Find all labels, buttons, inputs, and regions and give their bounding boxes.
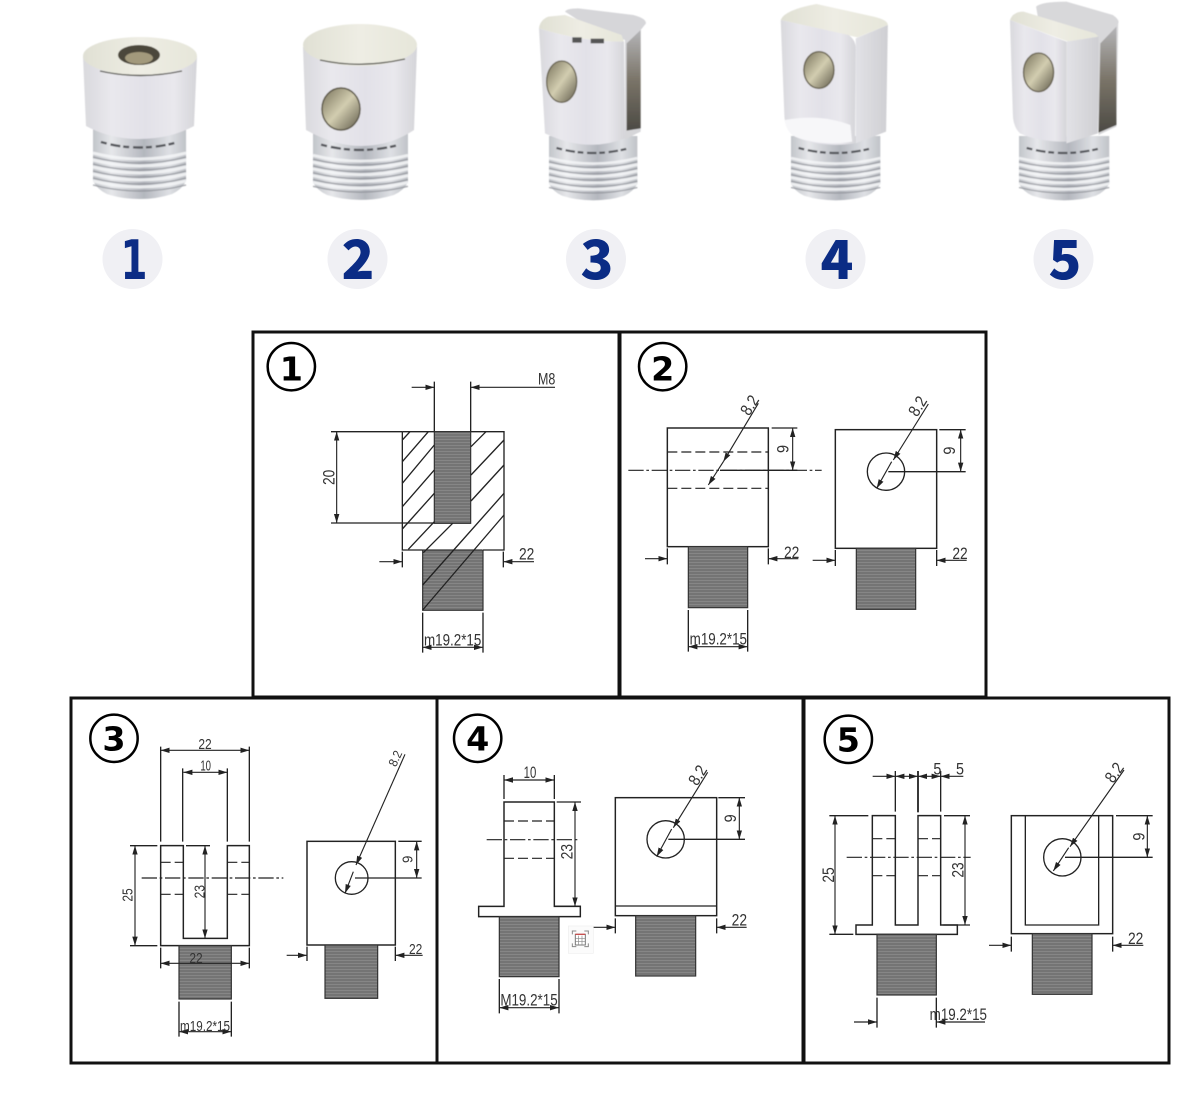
panel: drawing 2 <box>620 332 986 697</box>
number 1 <box>268 343 315 390</box>
front view <box>593 762 747 976</box>
side view <box>819 759 987 1028</box>
front view: 8.2 <box>904 393 931 420</box>
number 5 <box>825 716 872 763</box>
product 1 photo <box>83 37 197 199</box>
dimension 22 <box>379 545 534 567</box>
side view: 22 <box>189 951 203 967</box>
panel: drawing 5 <box>804 698 1169 1063</box>
dimension m19.2*15 <box>423 613 483 653</box>
badge 4 <box>806 216 866 295</box>
side view: 23 <box>949 862 968 878</box>
badge 3: 3 <box>581 216 613 295</box>
side view <box>628 392 822 652</box>
front view: 8.2 <box>386 748 405 769</box>
side view: 10 <box>200 759 211 775</box>
dimension 22: 22 <box>519 545 534 564</box>
product 3 photo <box>539 8 646 200</box>
number 5: 5 <box>837 721 860 760</box>
number 3: 3 <box>102 720 126 759</box>
front view: 8.2 <box>684 762 711 789</box>
front view <box>287 748 423 998</box>
number 2: 2 <box>651 350 674 389</box>
product 4 photo <box>781 4 888 200</box>
front view <box>813 393 968 609</box>
section view <box>402 432 504 610</box>
product photos row <box>83 2 1119 200</box>
panel: drawing 4 <box>437 698 803 1063</box>
dimension M8: M8 <box>538 369 555 388</box>
number 4 <box>454 715 501 762</box>
product 5 photo <box>1010 2 1119 200</box>
side view: 25 <box>819 867 838 883</box>
side view: 8.2 <box>736 392 763 419</box>
front view: 22 <box>952 544 968 563</box>
side view: 9 <box>773 445 792 453</box>
number badges row <box>102 216 1094 295</box>
side view: m19.2*15 <box>930 1005 987 1024</box>
dimension 20 <box>320 432 434 523</box>
badge 1 <box>102 229 162 292</box>
number 3 <box>90 715 138 762</box>
side view: m19.2*15 <box>690 630 747 649</box>
side view: 5 <box>956 759 964 778</box>
side view: 5 <box>933 759 941 778</box>
number 2 <box>639 343 686 390</box>
front view: 9 <box>940 447 959 455</box>
front view: 9 <box>401 856 417 863</box>
product 2 photo <box>303 24 417 200</box>
badge 3 <box>566 216 626 295</box>
front view: 9 <box>721 814 740 822</box>
panel: drawing 3 <box>71 698 437 1063</box>
side view: M19.2*15 <box>500 991 558 1010</box>
side view <box>479 763 581 1013</box>
icon: calculator overlay <box>568 926 593 953</box>
number 1: 1 <box>280 350 303 389</box>
number 4: 4 <box>466 720 489 759</box>
dimension 20: 20 <box>320 470 339 485</box>
panel: drawing 1 <box>253 332 619 697</box>
badge 2: 2 <box>342 216 374 295</box>
side view: 22 <box>784 543 799 562</box>
front view: 22 <box>409 942 422 958</box>
side view: 23 <box>193 885 209 898</box>
front view <box>989 759 1153 994</box>
front view: 8.2 <box>1101 759 1128 786</box>
front view: 9 <box>1129 833 1148 841</box>
side view: 22 <box>198 737 212 753</box>
dimension M8 <box>412 369 555 432</box>
side view: 23 <box>558 844 577 859</box>
badge 1: 1 <box>120 229 148 292</box>
badge 5: 5 <box>1049 216 1081 295</box>
side view <box>121 737 283 1037</box>
badge 2 <box>328 216 388 295</box>
side view: m19.2*15 <box>180 1019 230 1035</box>
side view: 10 <box>524 763 536 782</box>
front view: 22 <box>732 911 747 930</box>
badge 5 <box>1034 216 1094 295</box>
front view: 22 <box>1128 929 1143 948</box>
side view: 25 <box>121 888 137 902</box>
dimension m19.2*15: m19.2*15 <box>424 631 481 650</box>
badge 4: 4 <box>821 216 853 295</box>
